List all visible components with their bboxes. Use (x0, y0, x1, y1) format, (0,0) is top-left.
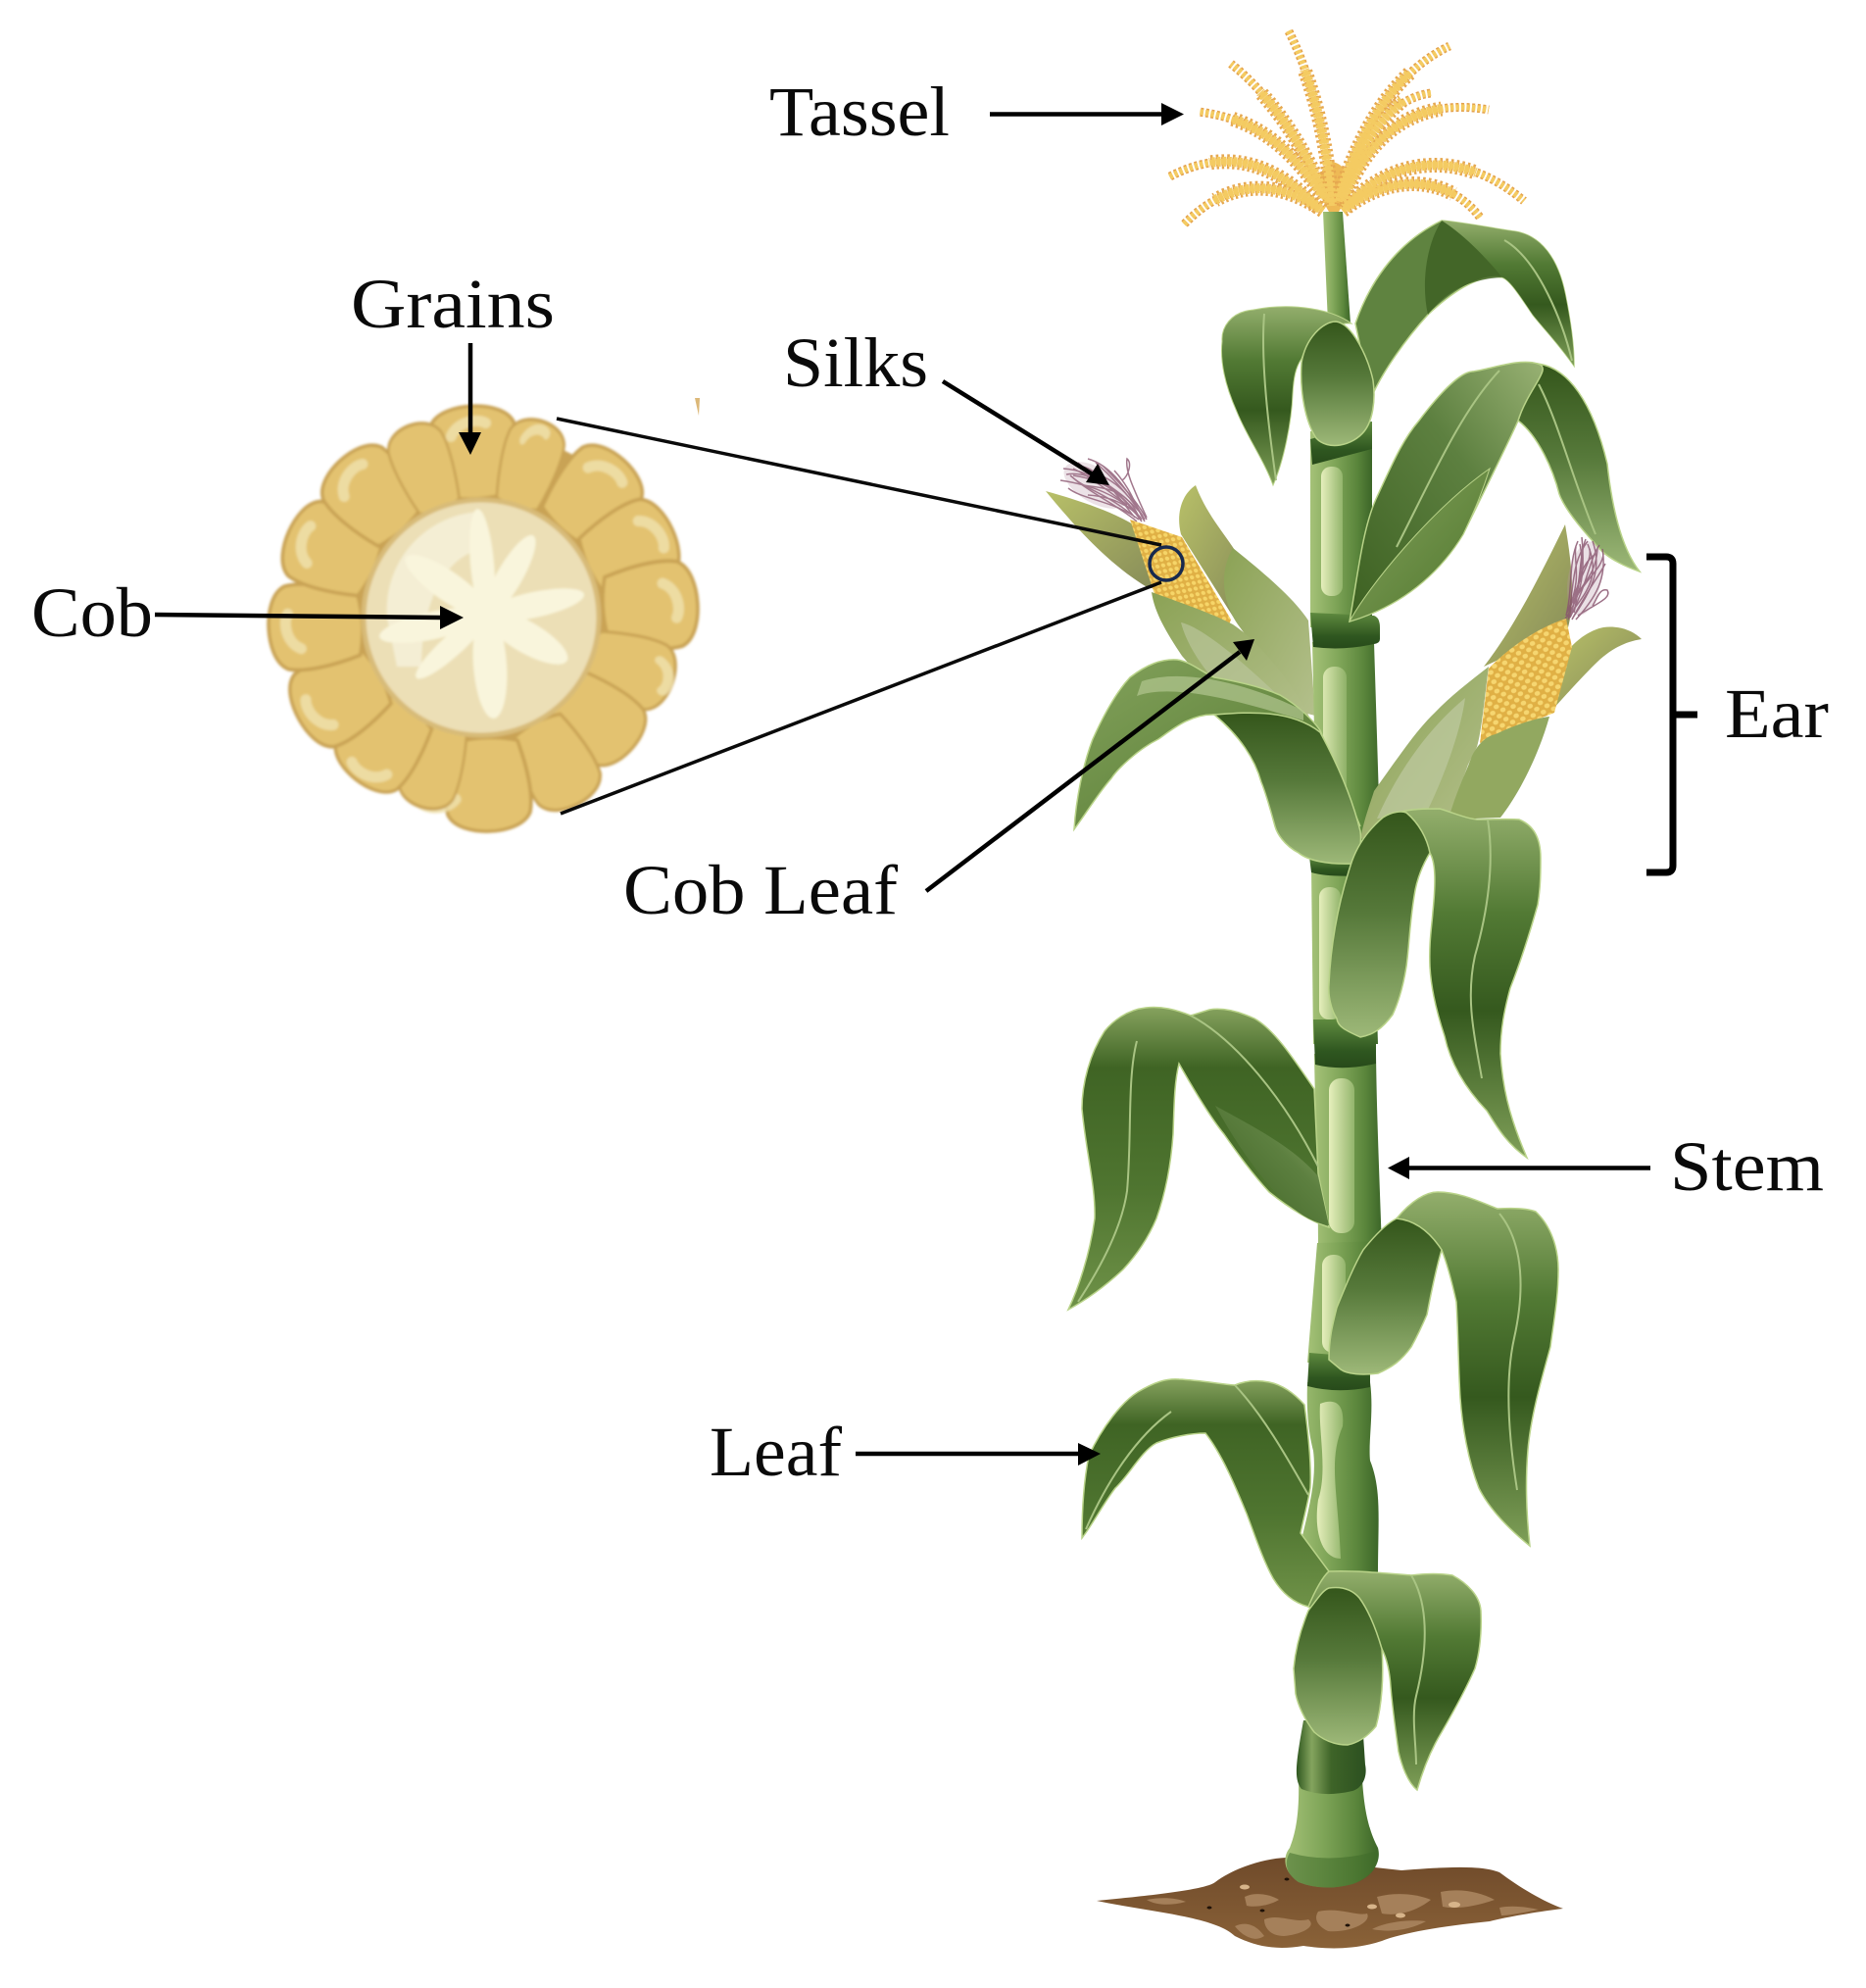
grain cross-section (267, 404, 701, 833)
stem segment 2 (1312, 642, 1381, 863)
node 1 (1310, 422, 1372, 465)
bracket: ear (1646, 557, 1697, 872)
leaf: left middle (1068, 1007, 1329, 1310)
right husk (1554, 627, 1642, 708)
leaf: left lower (1082, 1379, 1329, 1607)
node 2 (1310, 613, 1380, 648)
back blade (1398, 809, 1541, 1158)
label: Silks: Silks (783, 323, 928, 402)
leaf: around ear 1 (1074, 660, 1360, 864)
leaf: upper right long (1350, 362, 1640, 621)
zoom lines from cross-section to ear (557, 419, 1161, 814)
stem segment 3 (1311, 868, 1378, 1044)
dark fold (1214, 713, 1360, 864)
front left husk (1360, 667, 1489, 839)
upper thin stem (1323, 212, 1350, 323)
arrow: leaf (856, 1443, 1101, 1466)
zoom circle on ear (1150, 547, 1183, 580)
fold (1329, 1218, 1442, 1374)
stem segment 5 (1307, 1241, 1382, 1363)
label: Stem: Stem (1670, 1127, 1824, 1206)
stem (1097, 212, 1563, 1948)
small tan fragment (695, 398, 700, 416)
arrow: grains (459, 343, 481, 455)
cob centre (364, 500, 599, 735)
fold (1329, 812, 1430, 1037)
front right husk (1449, 717, 1549, 820)
leaf: top left fold (1221, 307, 1374, 485)
node 3 (1309, 857, 1372, 876)
arrow: tassel (990, 103, 1184, 125)
back husk (1484, 524, 1572, 667)
soil (1097, 1779, 1563, 1948)
inner blade (1215, 1106, 1329, 1225)
label: Cob Leaf: Cob Leaf (623, 851, 898, 929)
grains ring (267, 404, 701, 833)
silk 1 (1056, 452, 1147, 522)
stem segment 1 (1310, 422, 1372, 627)
ear 2 (1360, 524, 1642, 839)
label: Grains: Grains (351, 265, 555, 343)
arrow: cob (155, 606, 464, 629)
back right husk (1179, 485, 1250, 620)
leaf: below ear 2 (1329, 809, 1541, 1158)
stem segment 4 (1314, 1054, 1382, 1250)
label: Tassel: Tassel (769, 73, 950, 151)
inner lighter blade (1350, 469, 1490, 621)
label: Leaf: Leaf (710, 1413, 842, 1491)
upper blade (1074, 660, 1360, 829)
ear 1 husk and corn (behind stem) (1046, 452, 1315, 721)
arrow: stem (1388, 1157, 1650, 1179)
far drooping part (1518, 364, 1640, 572)
silk 2 (1562, 537, 1608, 621)
node 5 (1307, 1353, 1370, 1390)
stem base (1285, 1779, 1379, 1888)
back (1397, 1192, 1558, 1546)
stem segment 6 (1294, 1382, 1379, 1578)
fold (1294, 1587, 1383, 1745)
label: Ear: Ear (1725, 674, 1829, 753)
front blade (1350, 362, 1543, 621)
husk front left (1152, 592, 1311, 721)
label: Cob: Cob (31, 573, 153, 652)
leaf: top right arc (1355, 221, 1574, 398)
node 4 (1313, 1019, 1376, 1068)
corn ear 2 (1480, 619, 1572, 743)
arrow: cob leaf (926, 639, 1254, 891)
arrow: silks (943, 381, 1109, 485)
lower node (1297, 1720, 1366, 1794)
fold (1301, 322, 1374, 445)
leaf: bottom (1294, 1571, 1481, 1790)
back (1308, 1571, 1481, 1790)
leaf: right lower (1329, 1192, 1558, 1546)
tassel (1168, 29, 1524, 225)
husk front right (1224, 548, 1315, 716)
back left husk (1046, 491, 1166, 588)
corn ear 1 (1130, 520, 1231, 637)
